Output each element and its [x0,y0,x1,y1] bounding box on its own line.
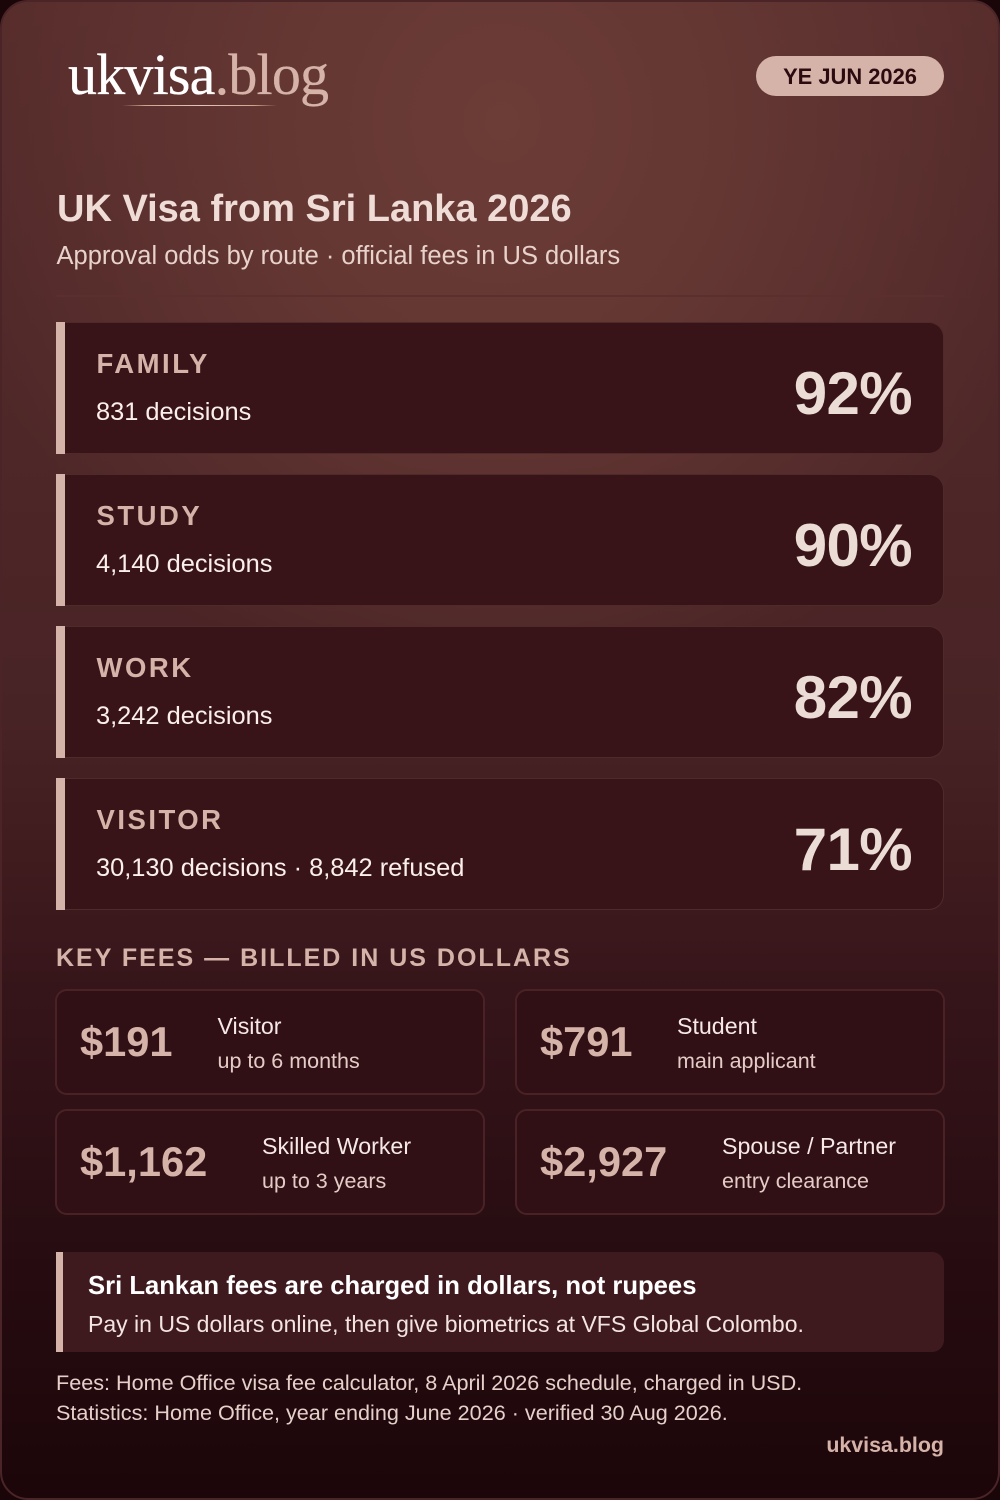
fee: student: main applicant [677,1049,816,1073]
panel: visitor [56,778,944,910]
panel: family: 831 decisions [96,398,251,426]
logo: ukvisa.blog [68,42,328,107]
fee: student: Student [677,1013,757,1039]
fee: skilled worker: up to 3 years [262,1169,386,1193]
callout [56,1252,944,1352]
fee: spouse / partner: $2,927 [540,1138,667,1185]
panel: study: 4,140 decisions [96,550,272,578]
fee: student [515,989,945,1095]
panel: visitor: 30,130 decisions · 8,842 refused [96,854,464,882]
key fees heading: KEY FEES — BILLED IN US DOLLARS [56,944,572,972]
panel: work [56,626,944,758]
source notes: Statistics: Home Office, year ending June 2026 · verified 30 Aug 2026. [56,1400,728,1424]
footer brand: ukvisa.blog [826,1433,944,1457]
fee: spouse / partner [515,1109,945,1215]
period badge: YE JUN 2026 [783,64,917,89]
panel: family: 92% [794,360,912,427]
panel: visitor: VISITOR [96,804,224,835]
title: UK Visa from Sri Lanka 2026 [57,188,572,230]
fee: visitor: $191 [80,1018,173,1065]
panel: work: 3,242 decisions [96,702,272,730]
panel: study: 90% [794,512,912,579]
panel: family [56,322,944,454]
source notes [56,1370,802,1424]
panel: visitor: 71% [794,816,912,883]
fee: skilled worker: $1,162 [80,1138,207,1185]
panel: study [56,474,944,606]
fee: visitor: up to 6 months [218,1049,360,1073]
panel: study: STUDY [96,500,202,531]
fee: spouse / partner: entry clearance [722,1169,869,1193]
period badge [756,56,944,96]
fee: visitor: Visitor [218,1013,282,1039]
fee: student: $791 [540,1018,633,1065]
logo underline [122,105,277,106]
fee: skilled worker [55,1109,485,1215]
source notes: Fees: Home Office visa fee calculator, 8 April 2026 schedule, charged in USD. [56,1370,802,1395]
panel: family: FAMILY [96,348,210,379]
fee: spouse / partner: Spouse / Partner [722,1133,896,1159]
fee: visitor [55,989,485,1095]
subtitle: Approval odds by route · official fees in US dollars [56,242,620,270]
panel: work: WORK [96,652,194,683]
panel: work: 82% [794,664,912,731]
fee: skilled worker: Skilled Worker [262,1133,411,1159]
callout heading: Sri Lankan fees are charged in dollars, not rupees [88,1272,696,1300]
callout text: Pay in US dollars online, then give biometrics at VFS Global Colombo. [88,1311,804,1337]
